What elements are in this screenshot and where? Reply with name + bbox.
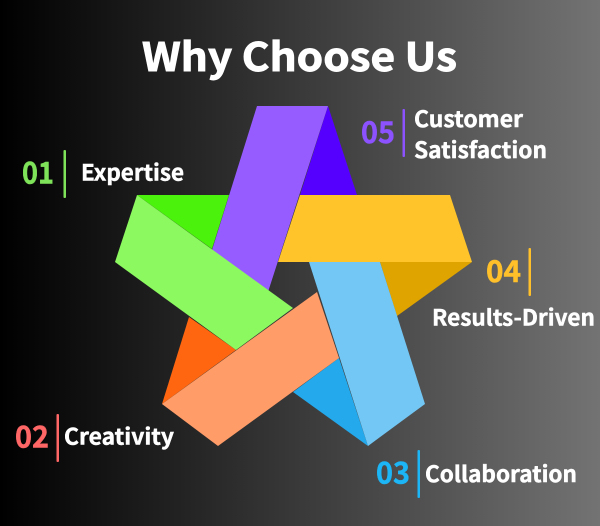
number 05: 05	[361, 108, 395, 152]
band: light blue	[309, 262, 425, 446]
number 02: 02	[15, 412, 49, 456]
divider 03	[418, 450, 420, 498]
label Customer: Customer	[414, 102, 523, 134]
label Results-Driven: Results-Driven	[432, 300, 595, 332]
fold: yellow	[380, 262, 472, 316]
band: yellow	[278, 195, 472, 262]
item 05: Customer Satisfaction	[361, 102, 547, 165]
item 04: Results-Driven	[432, 247, 595, 332]
label Collaboration: Collaboration	[425, 457, 577, 489]
divider 05	[402, 109, 405, 157]
title: Why Choose Us	[142, 27, 457, 83]
divider 02	[56, 414, 59, 462]
item 02: Creativity	[15, 412, 174, 462]
fold: orange	[162, 317, 236, 404]
fold: purple	[300, 106, 357, 195]
number 03: 03	[376, 448, 410, 492]
band: green	[115, 195, 293, 350]
divider 01	[64, 150, 66, 198]
fold: blue	[293, 358, 368, 446]
band: salmon	[162, 292, 339, 446]
band: purple	[212, 106, 328, 292]
label Satisfaction: Satisfaction	[414, 133, 547, 165]
fold: green	[137, 195, 229, 249]
star diagram	[115, 106, 472, 446]
label Expertise: Expertise	[81, 156, 184, 188]
number 01: 01	[22, 148, 54, 192]
item 01: Expertise	[22, 148, 184, 198]
item 03: Collaboration	[376, 448, 577, 498]
divider 04	[528, 248, 531, 296]
label Creativity: Creativity	[64, 420, 174, 452]
number 04: 04	[486, 247, 521, 291]
